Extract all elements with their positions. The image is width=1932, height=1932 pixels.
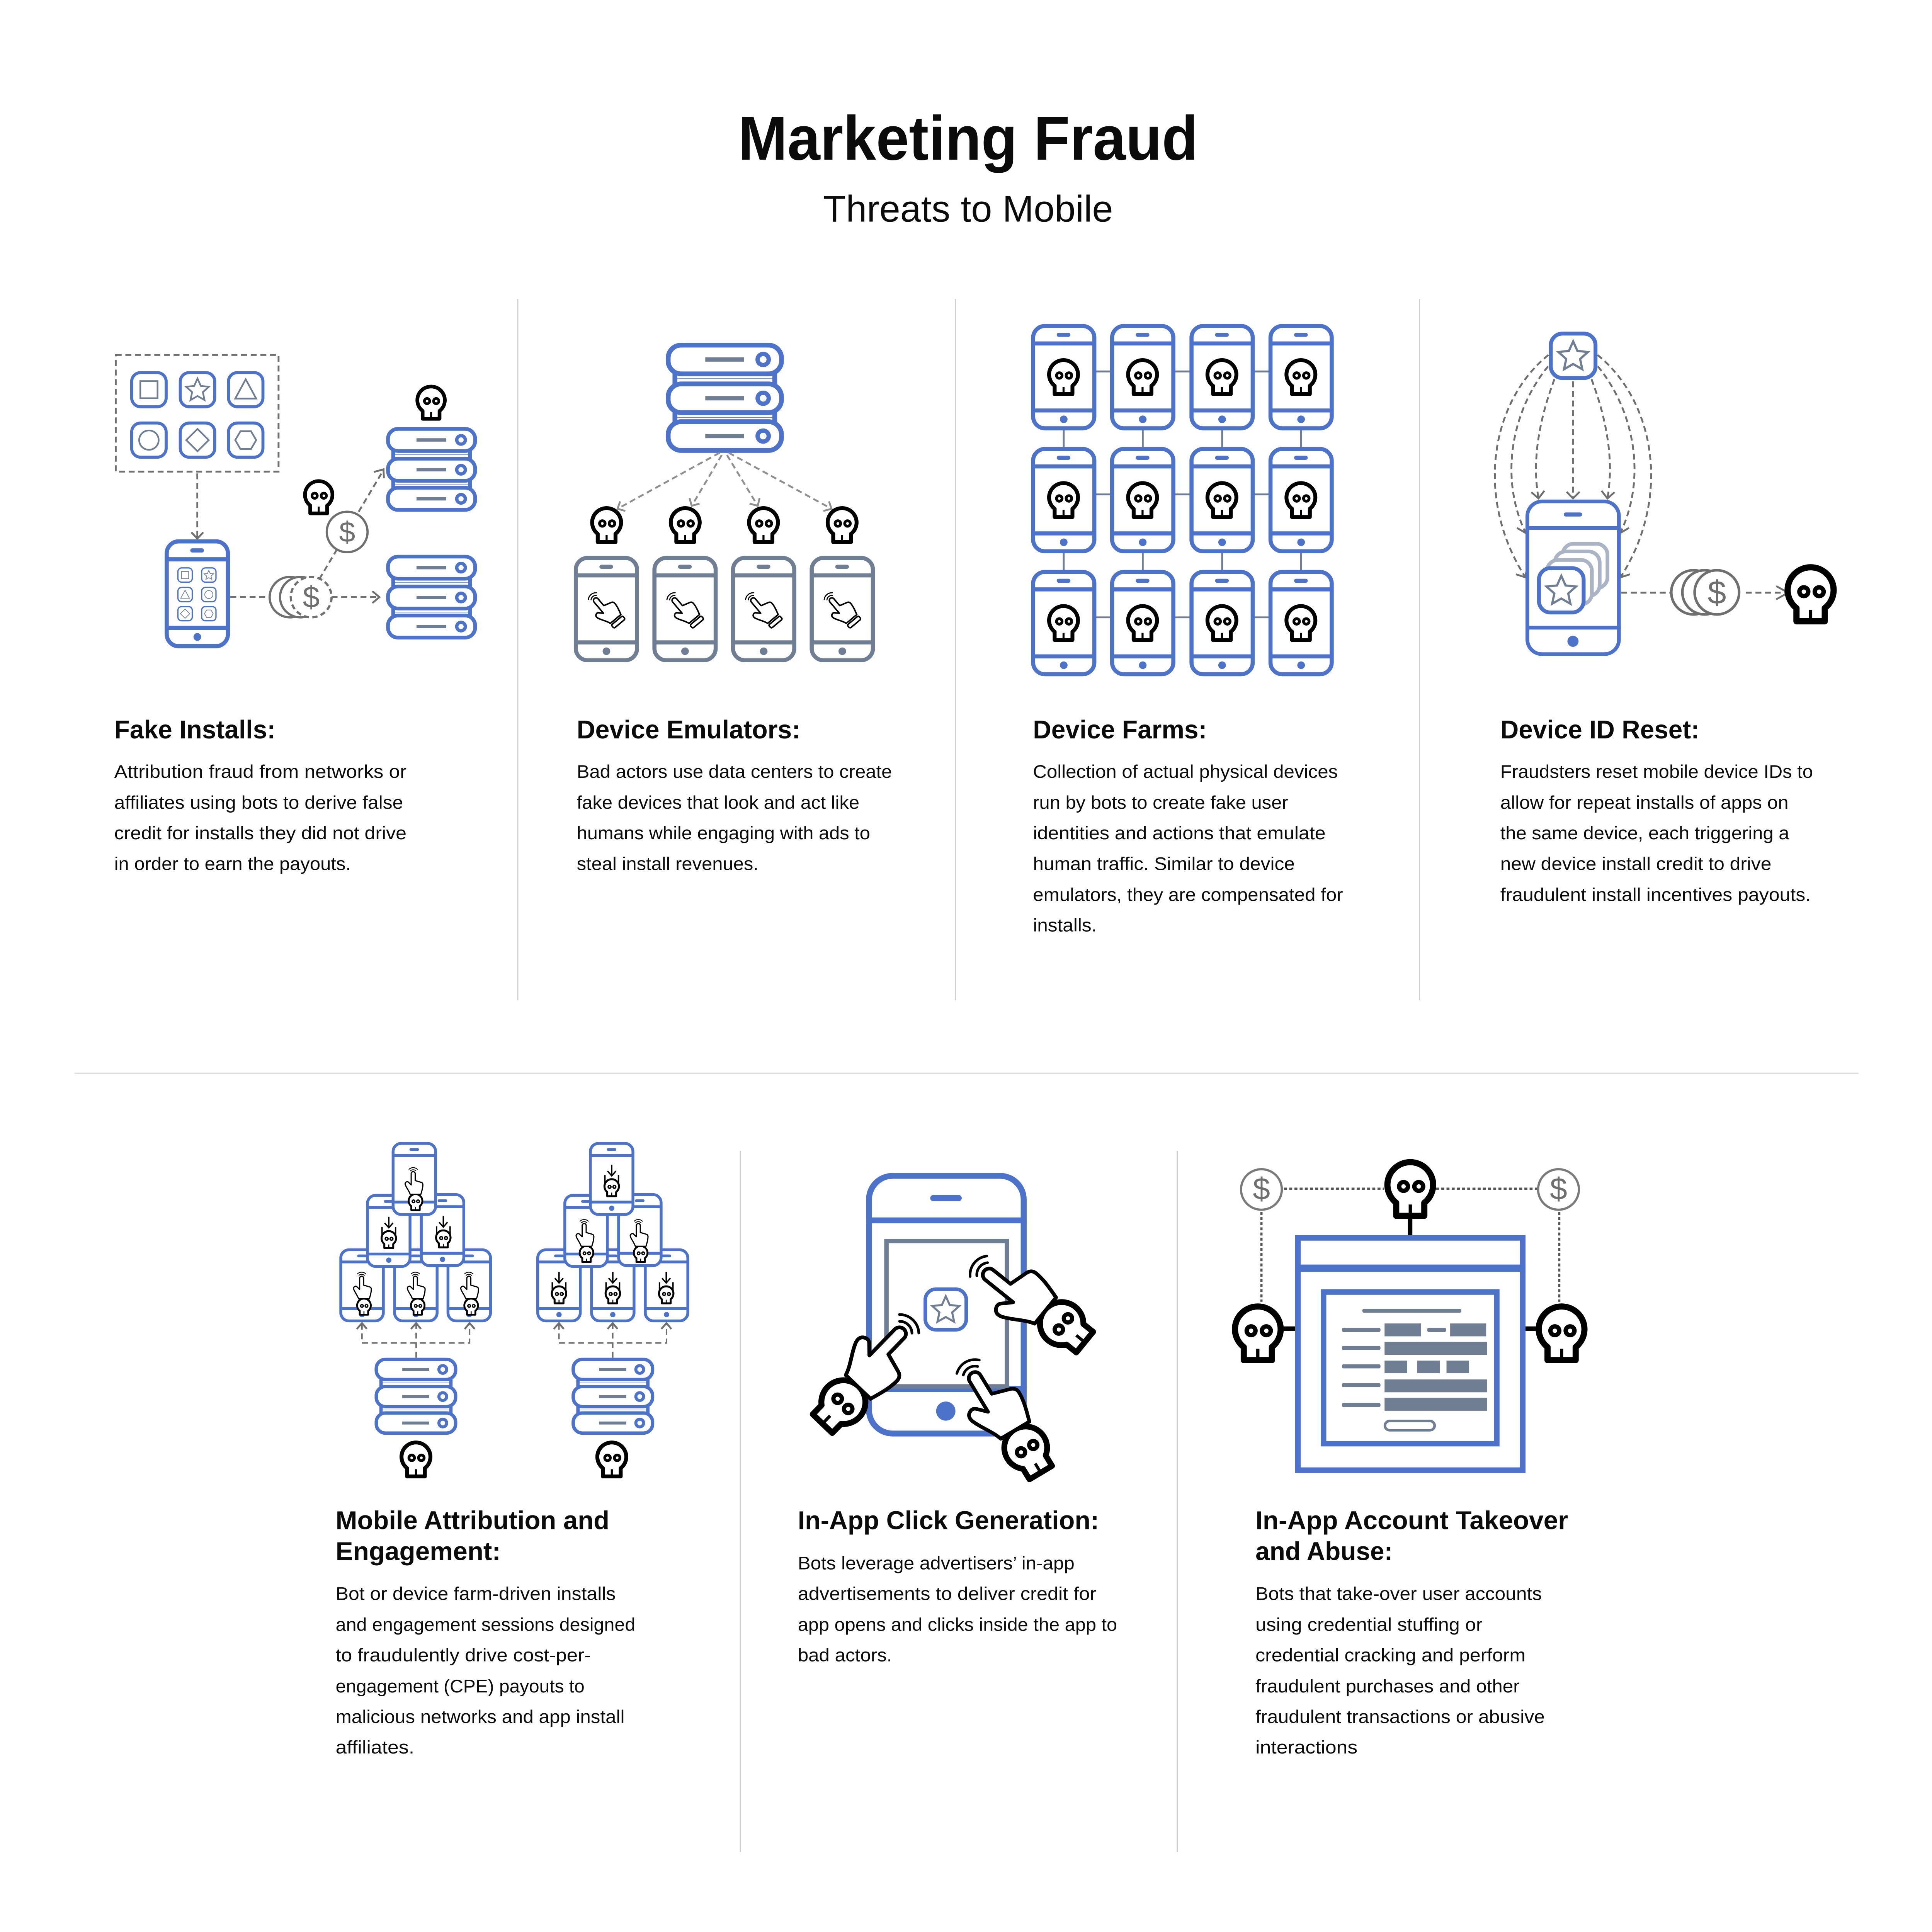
title: Marketing Fraud <box>738 104 1198 173</box>
heading: Engagement: <box>336 1537 501 1566</box>
body: allow for repeat installs of apps on <box>1500 793 1789 813</box>
panel: device emulators text <box>577 715 892 874</box>
arrow: coins to lower server <box>332 591 379 603</box>
body: humans while engaging with ads to <box>577 823 870 844</box>
body <box>577 762 892 874</box>
hand with skull, left <box>798 1302 935 1440</box>
phone <box>866 1176 1027 1434</box>
body <box>1255 1584 1545 1758</box>
panel: device id reset illustration <box>1495 333 1833 654</box>
body: app opens and clicks inside the app to <box>798 1615 1117 1635</box>
coins: $ <box>303 580 320 614</box>
arrow: raised coin to upper server <box>359 469 384 512</box>
body <box>1033 762 1343 935</box>
phone <box>1526 502 1621 654</box>
body: fraudulent install incentives payouts. <box>1500 885 1811 905</box>
heading: Mobile Attribution and <box>336 1506 609 1535</box>
body <box>798 1553 1117 1666</box>
body: human traffic. Similar to device <box>1033 854 1295 874</box>
phone grid <box>1033 326 1332 674</box>
heading: Device ID Reset: <box>1500 715 1699 744</box>
right server <box>573 1359 653 1433</box>
body: affiliates using bots to derive false <box>114 793 403 813</box>
skull over server <box>417 386 445 419</box>
skull, left <box>1235 1306 1281 1360</box>
left dashed arrows <box>357 1323 475 1358</box>
body: bad actors. <box>798 1645 892 1666</box>
front star tile <box>1539 568 1583 612</box>
hand with skull, bottom <box>944 1347 1060 1489</box>
emulated phones <box>576 558 873 660</box>
heading <box>1255 1506 1568 1566</box>
heading: and Abuse: <box>1255 1537 1393 1566</box>
login form <box>1342 1309 1487 1430</box>
body <box>114 762 406 874</box>
right skull <box>597 1442 626 1476</box>
window frame <box>1295 1238 1526 1470</box>
right phone pyramid <box>537 1143 688 1321</box>
body: credential cracking and perform <box>1255 1645 1526 1666</box>
body: advertisements to deliver credit for <box>798 1584 1096 1604</box>
skull by coin <box>305 481 332 514</box>
dollar coin, left <box>1241 1169 1282 1210</box>
panel: fake installs illustration <box>116 355 475 646</box>
body: Collection of actual physical devices <box>1033 762 1338 782</box>
body: Bot or device farm-driven installs <box>336 1584 616 1604</box>
panel: device farms illustration <box>1033 326 1332 674</box>
body: and engagement sessions designed <box>336 1615 635 1635</box>
screen frame <box>886 1241 1007 1386</box>
panel: account takeover illustration <box>1235 1162 1585 1470</box>
body: the same device, each triggering a <box>1500 823 1789 844</box>
body: affiliates. <box>336 1737 414 1758</box>
heading: In-App Account Takeover <box>1255 1506 1568 1535</box>
heading: Device Emulators: <box>577 715 800 744</box>
skull, top <box>1388 1162 1433 1216</box>
star app tile <box>1551 333 1595 378</box>
subtitle: Threats to Mobile <box>823 189 1113 230</box>
heading: In-App Click Generation: <box>798 1506 1099 1535</box>
panel: account takeover text <box>1255 1506 1568 1758</box>
body <box>336 1584 635 1758</box>
panel: mobile attribution text <box>336 1506 635 1758</box>
body: run by bots to create fake user <box>1033 793 1288 813</box>
body: engagement (CPE) payouts to <box>336 1676 585 1697</box>
body: emulators, they are compensated for <box>1033 885 1343 905</box>
body: Bad actors use data centers to create <box>577 762 892 782</box>
skull connectors <box>1282 1217 1537 1328</box>
panel: mobile attribution illustration <box>341 1143 688 1476</box>
body: Attribution fraud from networks or <box>114 762 406 782</box>
dollar coin, right <box>1538 1169 1579 1210</box>
coins <box>270 577 332 617</box>
phone with apps <box>167 541 228 646</box>
arrow: phone to coins <box>230 596 270 598</box>
curved dashed arrows <box>1495 355 1651 577</box>
dollar coin, left: $ <box>1253 1172 1270 1206</box>
heading <box>336 1506 609 1566</box>
arrow: coins to skull <box>1746 586 1788 599</box>
stacked app tiles <box>1547 544 1607 604</box>
body: to fraudulently drive cost-per- <box>336 1645 591 1666</box>
raised coin <box>327 512 367 552</box>
dollar coin, right: $ <box>1550 1172 1567 1206</box>
body: Bots that take-over user accounts <box>1255 1584 1542 1604</box>
body: fraudulent purchases and other <box>1255 1676 1520 1697</box>
body: malicious networks and app install <box>336 1707 624 1727</box>
left skull <box>401 1442 430 1476</box>
panel: in-app click text <box>798 1506 1117 1666</box>
panel: fake installs text <box>114 715 406 874</box>
coins <box>1671 570 1739 614</box>
body: installs. <box>1033 915 1097 935</box>
dotted links <box>1262 1189 1559 1302</box>
star tile <box>925 1289 966 1330</box>
panel dividers <box>75 299 1859 1852</box>
arrow: phone to coins <box>1621 592 1670 594</box>
body: using credential stuffing or <box>1255 1615 1483 1635</box>
right dashed arrows <box>554 1323 671 1358</box>
body: interactions <box>1255 1737 1357 1758</box>
heading: Fake Installs: <box>114 715 276 744</box>
panel: device emulators illustration <box>576 345 873 660</box>
arrow: coins to raised coin <box>319 550 337 579</box>
body: in order to earn the payouts. <box>114 854 351 874</box>
panel: device farms text <box>1033 715 1343 935</box>
panel: device id reset text <box>1500 715 1813 905</box>
connectors <box>1064 371 1301 617</box>
body: steal install revenues. <box>577 854 759 874</box>
server <box>668 345 781 451</box>
body <box>1500 762 1813 905</box>
skull, right <box>1539 1306 1585 1360</box>
left phone pyramid <box>341 1143 491 1321</box>
coins: $ <box>1708 574 1726 611</box>
body: fraudulent transactions or abusive <box>1255 1707 1545 1727</box>
hand with skull, right <box>958 1239 1099 1367</box>
lower server <box>388 557 475 638</box>
body: identities and actions that emulate <box>1033 823 1326 844</box>
body: credit for installs they did not drive <box>114 823 406 844</box>
body: new device install credit to drive <box>1500 854 1771 874</box>
dashed arrows to skulls <box>617 453 832 511</box>
skulls <box>592 508 857 542</box>
panel: in-app click illustration <box>798 1176 1099 1489</box>
upper server <box>388 429 475 510</box>
arrow: grid to phone <box>191 473 203 539</box>
heading: Device Farms: <box>1033 715 1207 744</box>
dashed app grid <box>116 355 279 471</box>
body: Fraudsters reset mobile device IDs to <box>1500 762 1813 782</box>
left server <box>376 1359 456 1433</box>
raised coin: $ <box>339 516 355 548</box>
skull <box>1787 567 1833 621</box>
body: fake devices that look and act like <box>577 793 859 813</box>
body: Bots leverage advertisers’ in-app <box>798 1553 1075 1574</box>
